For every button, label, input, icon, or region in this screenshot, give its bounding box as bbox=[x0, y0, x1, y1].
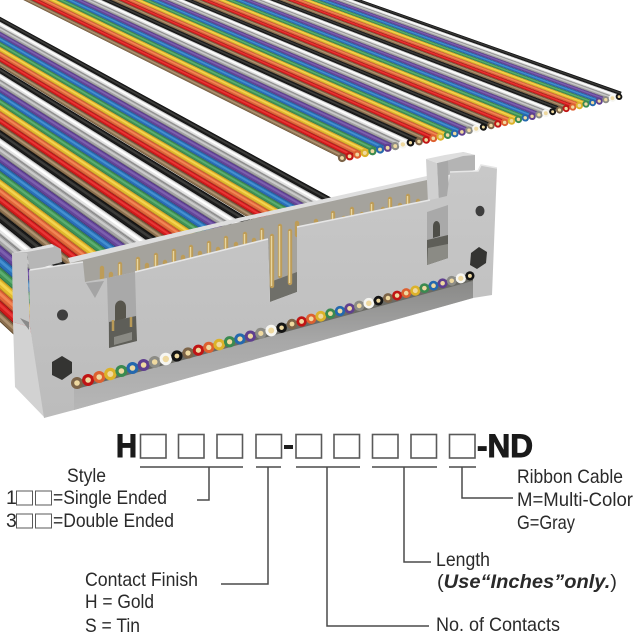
contact finish legend: H = Gold bbox=[85, 591, 154, 613]
front face top highlights bbox=[30, 165, 497, 272]
upper ribbon cable bbox=[23, 0, 622, 158]
length legend: (Use“Inches”only.) bbox=[437, 571, 617, 593]
style legend: 3 bbox=[6, 510, 17, 532]
upper ribbon wire ends bbox=[338, 90, 622, 165]
letter H: H bbox=[116, 428, 137, 464]
contact finish legend bbox=[85, 569, 198, 637]
IDC connector bbox=[12, 152, 497, 418]
length leader bbox=[404, 467, 431, 562]
suffix -ND: -ND bbox=[477, 428, 533, 464]
style legend: Style bbox=[67, 465, 106, 487]
part number code bbox=[116, 428, 533, 464]
wire ends row bbox=[71, 271, 475, 389]
style legend bbox=[6, 465, 174, 532]
lower ribbon cable bbox=[0, 16, 331, 334]
right back post bbox=[426, 152, 475, 205]
style legend: =Double Ended bbox=[53, 510, 174, 532]
left latch notch bbox=[107, 272, 137, 348]
left back post bbox=[12, 244, 62, 271]
ribbon cable legend: Ribbon Cable bbox=[517, 466, 623, 488]
contact pins bbox=[102, 196, 418, 290]
style legend: 1 bbox=[6, 487, 17, 509]
lower strip under wire row bbox=[74, 274, 473, 410]
style legend: =Single Ended bbox=[53, 487, 167, 509]
left hex recess bbox=[52, 356, 72, 380]
right latch notch bbox=[427, 205, 448, 265]
dash bbox=[284, 445, 293, 449]
polarity triangle bbox=[86, 281, 104, 298]
contact finish legend: Contact Finish bbox=[85, 569, 198, 591]
connector back wall bbox=[70, 178, 432, 302]
bracket underlines bbox=[140, 466, 476, 468]
ribbon cable legend: M=Multi-Color bbox=[517, 489, 633, 511]
back wall top lip bbox=[68, 176, 427, 263]
right hex recess bbox=[470, 247, 487, 269]
length legend bbox=[436, 549, 617, 593]
contact finish legend: S = Tin bbox=[85, 615, 140, 637]
contact finish leader bbox=[221, 467, 268, 584]
style leader bbox=[197, 467, 209, 500]
left mounting hole bbox=[57, 310, 68, 320]
number of contacts leader bbox=[327, 467, 429, 626]
code boxes bbox=[140, 434, 475, 458]
right mounting hole bbox=[476, 206, 484, 216]
wire row shadow bbox=[76, 277, 472, 385]
ribbon cable legend: G=Gray bbox=[517, 512, 575, 534]
number of contacts legend: No. of Contacts bbox=[436, 614, 560, 636]
connector front face bbox=[29, 165, 497, 418]
centre notch shelf bbox=[270, 272, 297, 302]
ribbon cable legend bbox=[517, 466, 633, 534]
length legend: Length bbox=[436, 549, 490, 571]
ribbon cable leader bbox=[462, 467, 513, 498]
left end side facets bbox=[12, 251, 45, 418]
